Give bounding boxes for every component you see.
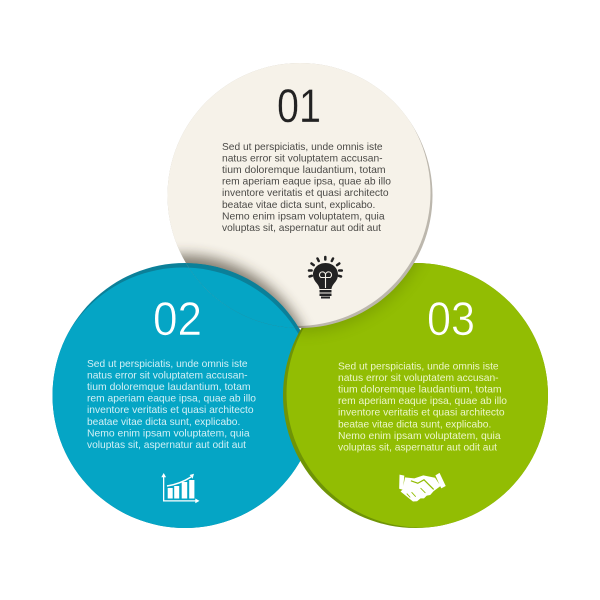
icon: light bulb [309,257,342,298]
icon: handshake [399,473,446,502]
number 02: 02 [153,292,202,345]
text block 03: Sed ut perspiciatis, unde omnis iste [338,362,499,372]
text block 01: Sed ut perspiciatis, unde omnis iste [222,142,383,153]
icon: bar chart [161,473,200,503]
text block 01: beatae vitae dicta sunt, explicabo. [222,200,375,211]
text block 01: inventore veritatis et quasi architecto [222,188,389,199]
text block 02: Nemo enim ipsam voluptatem, quia [87,428,250,439]
text block 01: Nemo enim ipsam voluptatem, quia [222,211,385,222]
text block 02: inventore veritatis et quasi architecto [87,405,254,416]
text block 03: natus error sit voluptatem accusan- [338,373,499,384]
text block 03: tium doloremque laudantium, totam [338,385,502,396]
text block 02: voluptas sit, aspernatur aut odit aut [87,440,246,451]
text block 02: beatae vitae dicta sunt, explicabo. [87,417,240,428]
panel: circle 03 green [283,260,554,528]
overlap: blue over cream [186,263,299,328]
number 01: 01 [277,79,321,132]
text block 03: beatae vitae dicta sunt, explicabo. [338,419,491,430]
text block 03: rem aperiam eaque ipsa, quae ab illo [338,396,507,407]
shadow: cream on green [300,263,422,336]
shadow: blue on cream [178,246,311,328]
text block 01: rem aperiam eaque ipsa, quae ab illo [222,177,391,188]
text block 03: inventore veritatis et quasi architecto [338,408,505,419]
text block 02: Sed ut perspiciatis, unde omnis iste [87,359,248,370]
text block 01: natus error sit voluptatem accusan- [222,154,383,165]
infographic: three overlapping circles [52,63,548,528]
text block 02: tium doloremque laudantium, totam [87,382,251,393]
number 03: 03 [427,292,475,345]
text block 01: voluptas sit, aspernatur aut odit aut [222,223,381,234]
text block 03: Nemo enim ipsam voluptatem, quia [338,431,501,442]
text block 02: rem aperiam eaque ipsa, quae ab illo [87,394,256,405]
text block 02: natus error sit voluptatem accusan- [87,371,248,382]
text block 01: tium doloremque laudantium, totam [222,165,386,176]
text block 03: voluptas sit, aspernatur aut odit aut [338,442,497,453]
panel: circle 01 cream [164,59,432,328]
panel: circle 02 blue [50,263,318,534]
